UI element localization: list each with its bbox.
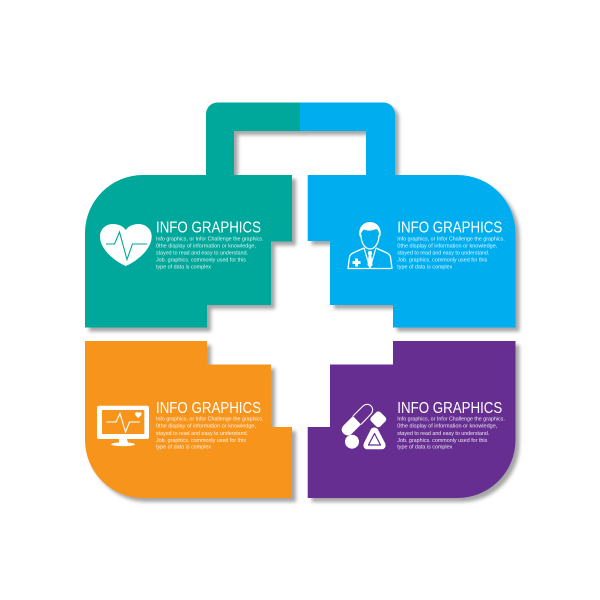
text block: purple — [397, 417, 505, 450]
icon: heart-rate monitor — [97, 406, 149, 446]
heading: orange: INFO GRAPHICS — [156, 400, 261, 417]
text block: purple: 0the display of information or knowledge, — [397, 424, 498, 430]
text block: teal: stayed to read and easy to understand. — [156, 251, 248, 257]
text block: teal — [156, 236, 264, 270]
text block: orange: Job. graphics. commonly used for this — [156, 438, 246, 444]
text block: purple: Info graphics, or Infor Challenge the graphics. — [397, 417, 505, 423]
text block: orange: stayed to read and easy to understand. — [156, 431, 248, 437]
text block: blue: type of data is complex — [397, 264, 452, 270]
panel: orange bottom-left — [85, 341, 292, 498]
text block: purple: stayed to read and easy to understand. — [397, 431, 490, 437]
panel: purple bottom-right — [308, 341, 516, 498]
icon: pills — [342, 404, 387, 449]
text block: teal: Job. graphics. commonly used for this — [156, 258, 246, 264]
icon: heart with pulse — [100, 224, 152, 266]
text block: purple: type of data is complex — [397, 444, 452, 450]
text block: blue — [397, 236, 505, 270]
text block: teal: 0the display of information or knowledge, — [156, 244, 256, 250]
text block: teal: type of data is complex — [156, 264, 211, 270]
text block: blue: Info graphics, or Infor Challenge the graphics. — [397, 236, 505, 242]
text block: teal: Info graphics, or Infor Challenge the graphics. — [156, 236, 264, 242]
text block: blue: stayed to read and easy to understand. — [397, 251, 490, 257]
icon: doctor — [348, 222, 392, 268]
text block: blue: Job. graphics. commonly used for this — [397, 258, 487, 264]
panel: blue top-right with handle — [300, 102, 516, 328]
panel: teal top-left with handle — [85, 102, 301, 328]
text block: orange: Info graphics, or Infor Challenge the graphics. — [156, 417, 264, 423]
text block: blue: 0the display of information or knowledge, — [397, 244, 498, 250]
heading: purple: INFO GRAPHICS — [397, 400, 502, 417]
text block: purple: Job. graphics. commonly used for this — [397, 438, 487, 444]
text block: orange: 0the display of information or knowledge, — [156, 424, 256, 430]
text block: orange — [156, 417, 264, 450]
heading: blue: INFO GRAPHICS — [397, 219, 502, 236]
text block: orange: type of data is complex — [156, 444, 211, 450]
heading: teal: INFO GRAPHICS — [156, 219, 261, 236]
